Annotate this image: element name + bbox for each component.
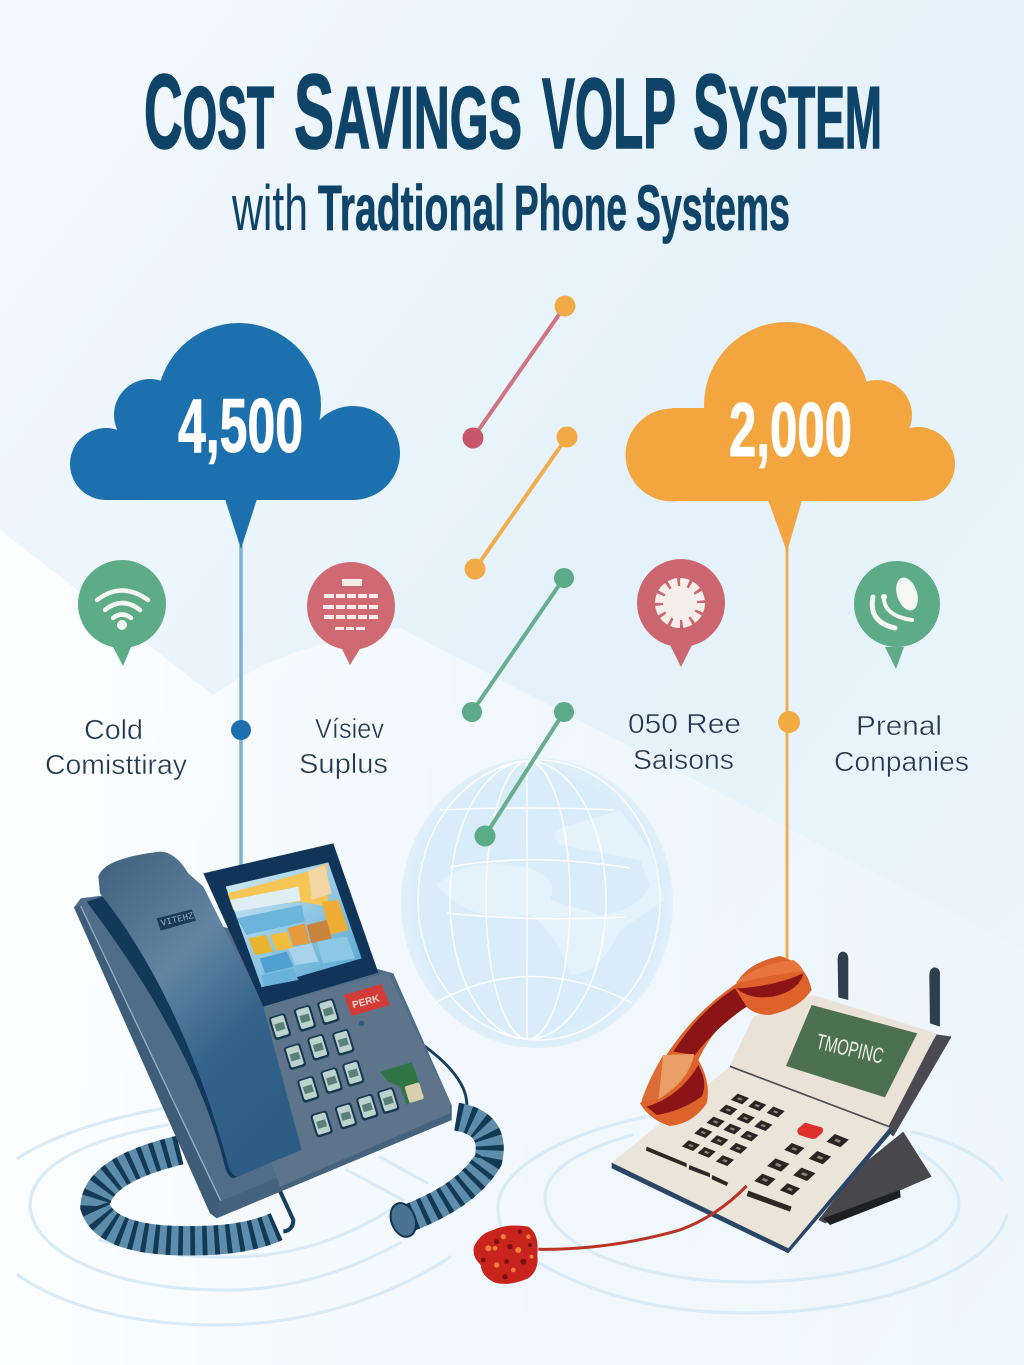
value: 4,500: [178, 384, 303, 469]
title: SYSTEM: [693, 53, 882, 171]
connector line: green lower: [474, 702, 574, 846]
base: [74, 895, 452, 1218]
subtitle: Tradtional: [318, 172, 505, 244]
dot orange: [778, 711, 800, 733]
label: 050 Ree Saisons: [628, 708, 741, 775]
rear side: [883, 1034, 952, 1137]
cradle shadow: [87, 895, 300, 1178]
pin: gear burst: [637, 559, 725, 667]
label: Cold Comisttiray: Cold: [84, 714, 143, 745]
coiled cord right: [386, 1117, 490, 1240]
globe: [401, 758, 673, 1048]
connector line: green: [462, 568, 574, 722]
pin: keypad: [307, 562, 395, 665]
red button: [344, 984, 390, 1016]
stand: [818, 1132, 932, 1225]
handset: [98, 852, 302, 1177]
traditional desk phone: [474, 952, 952, 1284]
label: Visiev Suplus: [299, 713, 388, 779]
red cord: [538, 1186, 747, 1249]
title: [144, 53, 882, 171]
dot blue: [231, 720, 251, 740]
label: Prenal Conpanies: Prenal: [856, 710, 942, 741]
thin cords: [273, 1039, 467, 1232]
title: SAVINGS: [294, 53, 522, 171]
green key: [380, 1062, 424, 1105]
green display: TMOPINC: [814, 1029, 886, 1069]
screen: [226, 862, 362, 987]
upper body: [730, 995, 937, 1127]
red key: [797, 1123, 823, 1139]
vertical line orange: [786, 545, 788, 965]
label: Visiev Suplus: Suplus: [299, 748, 388, 779]
keys: [682, 1094, 849, 1195]
subtitle: with: [231, 172, 308, 244]
handset: [640, 956, 812, 1126]
pin: phone: [854, 561, 940, 669]
bottom slots: [646, 1147, 792, 1212]
subtitle: Systems: [636, 172, 790, 244]
cloud: 4,500: [70, 323, 400, 549]
background white facet: [0, 530, 1024, 1365]
label: Visiev Suplus: Vísiev: [315, 713, 384, 744]
subtitle: Phone: [514, 172, 627, 244]
ripple rings: [18, 1108, 1007, 1325]
antennas: [838, 952, 940, 1027]
vertical line blue: [239, 545, 243, 865]
red knot: [474, 1226, 538, 1284]
screen bezel: [203, 843, 378, 1007]
label: 050 Ree Saisons: 050 Ree: [628, 708, 741, 739]
subtitle: [231, 172, 790, 244]
green display: [786, 1005, 917, 1097]
label: 050 Ree Saisons: Saisons: [633, 744, 734, 775]
keypad buttons: [268, 998, 400, 1138]
connector line: red: [462, 296, 576, 448]
cloud: 2,000: [626, 322, 955, 552]
deck edge: [612, 1127, 893, 1253]
lower deck: [612, 1067, 890, 1248]
handset label: VITEHZ: [160, 910, 195, 929]
coiled cord left: [95, 1150, 277, 1241]
keypad panel: [247, 973, 450, 1187]
led dots: [359, 1021, 364, 1026]
connector line: orange: [464, 426, 578, 580]
VoIP desk phone: [74, 843, 490, 1241]
value: 2,000: [729, 388, 852, 473]
label: Prenal Conpanies: [834, 710, 969, 777]
label: Cold Comisttiray: [45, 714, 187, 780]
red button: PERK: [351, 993, 382, 1011]
title: COST: [144, 53, 274, 171]
label: Prenal Conpanies: Conpanies: [834, 746, 969, 777]
title: VOLP: [542, 58, 676, 170]
pin: wifi: [78, 560, 166, 666]
label: Cold Comisttiray: Comisttiray: [45, 749, 187, 780]
